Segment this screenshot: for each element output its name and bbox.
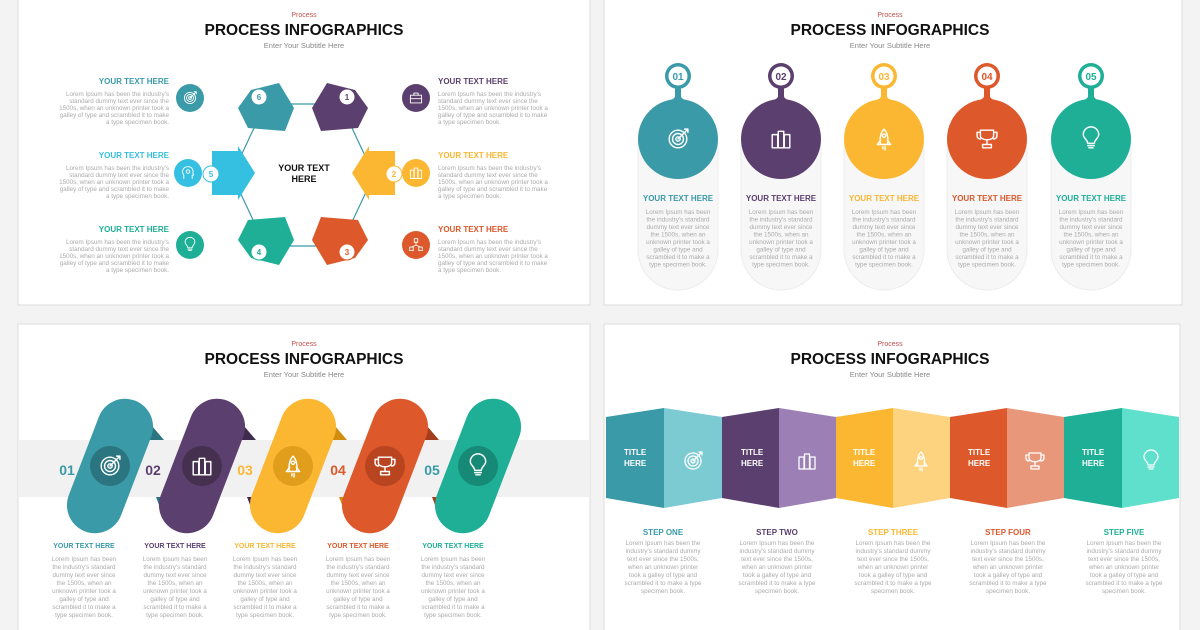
right text blocks: YOUR TEXT HERE	[438, 151, 509, 160]
fold 4	[950, 408, 1064, 508]
slide 4 step texts: when an unknown printer	[741, 564, 812, 571]
slide 3 header: Enter Your Subtitle Here	[264, 370, 344, 379]
fold 4: HERE	[968, 459, 991, 468]
slide 2 header: Process	[877, 12, 903, 19]
left text blocks: a type specimen book.	[106, 119, 169, 126]
left text blocks: galley of type and scrambled it to make	[60, 112, 169, 119]
left text blocks: YOUR TEXT HERE	[99, 151, 170, 160]
panel: slide 3 diagonal pills	[18, 324, 590, 630]
step 04 card: the industry's standard	[955, 216, 1019, 224]
slide 3 text columns: scrambled it to make a	[326, 604, 390, 611]
pill 03: 03	[237, 462, 253, 478]
center octagon	[239, 104, 367, 246]
slide 3 text columns: the industry's standard	[421, 564, 485, 571]
step 05 card: the 1500s, when an	[1064, 232, 1119, 238]
arrow 4	[238, 217, 294, 265]
slide 3 text columns: dummy text ever since	[326, 572, 390, 579]
arrow 4: 4	[257, 248, 262, 257]
slide 4 step texts: text ever since the 1500s,	[741, 556, 813, 563]
left text blocks: a type specimen book.	[106, 267, 169, 274]
step 05 card: galley of type and	[1066, 246, 1116, 254]
left text blocks: YOUR TEXT HERE	[99, 77, 170, 86]
slide 1 header: Enter Your Subtitle Here	[264, 41, 344, 50]
left text blocks: Lorem Ipsum has been the industry's	[66, 239, 169, 246]
fold 3: HERE	[853, 459, 876, 468]
arrow 3	[312, 217, 368, 265]
right text blocks: a type specimen book.	[438, 119, 501, 126]
slide 4 step texts: took a galley of type and	[743, 572, 812, 579]
step 03 card: galley of type and	[859, 246, 909, 254]
slide 3 text columns: unknown printer took a	[143, 588, 207, 595]
slide 3 text columns: unknown printer took a	[421, 588, 485, 595]
slide 4 step texts: took a galley of type and	[974, 572, 1043, 579]
step 02 card: unknown printer took a	[749, 239, 813, 246]
slide 3 text columns: dummy text ever since	[234, 572, 297, 579]
step 02 card: the industry's standard	[749, 216, 813, 224]
pill 04: 04	[330, 462, 346, 478]
arrow 2	[352, 146, 402, 200]
fold 1: HERE	[624, 459, 647, 468]
slide 3 text columns: the 1500s, when an	[426, 580, 481, 587]
slide 4 step texts: industry's standard dummy	[739, 548, 815, 555]
slide 3 text columns: dummy text ever since	[144, 572, 207, 579]
right text blocks: standard dummy text ever since the	[438, 98, 538, 105]
slide 4 header: Enter Your Subtitle Here	[850, 370, 930, 379]
right text blocks: galley of type and scrambled it to make	[438, 186, 548, 193]
slide 4 step texts: when an unknown printer	[1088, 564, 1159, 571]
step 04 card: 04	[981, 72, 993, 83]
slide 4 step texts: scrambled it to make a type	[854, 580, 932, 587]
slide 3 header: Process	[291, 341, 317, 348]
arrow 3: 3	[345, 248, 350, 257]
icon: head	[174, 159, 202, 187]
step 05 card: the industry's standard	[1059, 216, 1123, 224]
slide 4 step texts: industry's standard dummy	[625, 548, 701, 555]
slide 3 text columns: Lorem Ipsum has been	[233, 556, 298, 563]
step 04 card: the 1500s, when an	[960, 232, 1015, 238]
slide 4 step texts: scrambled it to make a type	[970, 580, 1047, 587]
icon: target	[176, 84, 204, 112]
step 02 card: dummy text ever since	[750, 224, 813, 231]
pill 02: 02	[145, 462, 161, 478]
fold 5	[1064, 408, 1179, 508]
pill 01	[59, 391, 164, 541]
arrow 5	[203, 146, 255, 200]
slide 4 step texts: text ever since the 1500s,	[972, 556, 1044, 563]
right text blocks: 1500s, when an unknown printer took a	[438, 253, 548, 260]
slide 2 header: Enter Your Subtitle Here	[850, 41, 930, 50]
center octagon: YOUR TEXT	[278, 163, 330, 173]
step 01 card: 01	[672, 72, 684, 83]
step 02 card	[741, 63, 821, 290]
slide 3 text columns: the 1500s, when an	[238, 580, 293, 587]
fold 1: TITLE	[624, 448, 647, 457]
slide 4 step texts: Lorem Ipsum has been the	[740, 540, 815, 547]
slide 3 text columns: galley of type and	[150, 596, 200, 603]
right text blocks: Lorem Ipsum has been the industry's	[438, 165, 541, 172]
fold 5: HERE	[1082, 459, 1105, 468]
fold 2: TITLE	[741, 448, 764, 457]
slide 1 header: PROCESS INFOGRAPHICS	[205, 22, 403, 39]
slide 3 text columns: the industry's standard	[326, 564, 390, 571]
panel: slide 1 hexagon process	[18, 0, 590, 305]
slide 4 step texts: Lorem Ipsum has been the	[971, 540, 1046, 547]
step 01 card: YOUR TEXT HERE	[643, 194, 714, 203]
right text blocks: galley of type and scrambled it to make	[438, 112, 548, 119]
slide 3 text columns: the 1500s, when an	[148, 580, 203, 587]
step 05 card: dummy text ever since	[1060, 224, 1123, 231]
slide 4 step texts: STEP TWO	[756, 528, 798, 537]
slide 4 step texts: scrambled it to make a type	[1086, 580, 1163, 587]
step 02 card: YOUR TEXT HERE	[746, 194, 817, 203]
step 04 card	[947, 63, 1027, 290]
slide 3 text columns: Lorem Ipsum has been	[143, 556, 208, 563]
slide 3 text columns: type specimen book.	[55, 612, 113, 619]
fold 2: HERE	[741, 459, 764, 468]
step 05 card: YOUR TEXT HERE	[1056, 194, 1127, 203]
slide 3 text columns: scrambled it to make a	[421, 604, 485, 611]
step 04 card: unknown printer took a	[955, 239, 1019, 246]
step 03 card: 03	[878, 72, 890, 83]
step 01 card: type specimen book.	[649, 262, 707, 268]
slide 4 step texts: took a galley of type and	[859, 572, 928, 579]
right text blocks: standard dummy text ever since the	[438, 246, 538, 253]
step 04 card: galley of type and	[962, 246, 1012, 254]
pill 04	[330, 391, 439, 541]
fold 5: TITLE	[1082, 448, 1105, 457]
slide 3 text columns: the 1500s, when an	[331, 580, 386, 587]
left text blocks: 1500s, when an unknown printer took a	[59, 105, 169, 112]
slide 1 header: Process	[291, 12, 317, 19]
step 02 card: galley of type and	[756, 246, 806, 254]
slide 4 step texts: took a galley of type and	[629, 572, 698, 579]
arrow 1	[312, 83, 368, 131]
slide 3 text columns: YOUR TEXT HERE	[53, 543, 115, 550]
slide 4 step texts: scrambled it to make a type	[738, 580, 816, 587]
step 05 card: Lorem Ipsum has been	[1059, 209, 1124, 216]
left text blocks: standard dummy text ever since the	[69, 98, 169, 105]
slide 2 header	[791, 12, 989, 50]
slide 3 header	[205, 341, 403, 379]
slide 4 step texts: industry's standard dummy	[970, 548, 1046, 555]
slide 4 step texts: STEP THREE	[868, 528, 919, 537]
pill 05	[424, 391, 529, 541]
fold 3: TITLE	[853, 448, 876, 457]
step 01 card: Lorem Ipsum has been	[646, 209, 711, 216]
arrow 5: 5	[209, 170, 214, 179]
left text blocks: standard dummy text ever since the	[69, 172, 169, 179]
step 01 card: the 1500s, when an	[651, 232, 706, 238]
fold 1	[606, 408, 722, 508]
step 03 card: Lorem Ipsum has been	[852, 209, 917, 216]
slide 4 step texts: specimen book.	[755, 588, 799, 595]
center octagon: HERE	[291, 174, 317, 184]
pill 03	[237, 391, 347, 541]
slide 4 header: PROCESS INFOGRAPHICS	[791, 351, 989, 368]
fold 4: TITLE	[968, 448, 991, 457]
slide 3 text columns: YOUR TEXT HERE	[327, 543, 389, 550]
slide 3 text columns: type specimen book.	[424, 612, 482, 619]
slide 3 text columns: dummy text ever since	[52, 572, 116, 579]
slide 3 text columns: Lorem Ipsum has been	[52, 556, 117, 563]
left text blocks: standard dummy text ever since the	[69, 246, 169, 253]
slide 3 text columns: YOUR TEXT HERE	[144, 543, 206, 550]
slide 4 step texts: specimen book.	[641, 588, 685, 595]
icon: bulb	[176, 231, 204, 259]
step 01 card: the industry's standard	[646, 216, 710, 224]
panel: slide 2 numbered circles	[604, 0, 1182, 305]
fold 3	[836, 408, 950, 508]
step 02 card: scrambled it to make a	[749, 254, 813, 261]
pill 01: 01	[59, 462, 75, 478]
slide 3 text columns: galley of type and	[59, 596, 109, 603]
slide 3 text columns: scrambled it to make a	[233, 604, 297, 611]
fold 2	[722, 408, 836, 508]
right text blocks: 1500s, when an unknown printer took a	[438, 179, 548, 186]
slide 3 text columns	[52, 543, 486, 619]
left text blocks: Lorem Ipsum has been the industry's	[66, 91, 169, 98]
slide 4 step texts: specimen book.	[1102, 588, 1146, 595]
step 03 card: the 1500s, when an	[857, 232, 912, 238]
step 03 card: type specimen book.	[855, 262, 913, 268]
slide 4 step texts: scrambled it to make a type	[624, 580, 702, 587]
step 01 card: unknown printer took a	[646, 239, 710, 246]
slide 4 step texts: Lorem Ipsum has been the	[856, 540, 931, 547]
step 02 card: 02	[775, 72, 787, 83]
slide 1 header	[205, 12, 403, 50]
step 03 card: YOUR TEXT HERE	[849, 194, 920, 203]
slide 4 step texts: industry's standard dummy	[1086, 548, 1162, 555]
slide 3 text columns: type specimen book.	[146, 612, 204, 619]
slide 2 header: PROCESS INFOGRAPHICS	[791, 22, 989, 39]
slide 3 text columns: type specimen book.	[329, 612, 387, 619]
step 04 card: YOUR TEXT HERE	[952, 194, 1023, 203]
left text blocks: YOUR TEXT HERE	[99, 225, 170, 234]
slide 3 text columns: the industry's standard	[233, 564, 297, 571]
slide 4 step texts: Lorem Ipsum has been the	[626, 540, 701, 547]
slide 4 step texts: text ever since the 1500s,	[627, 556, 699, 563]
slide 3 text columns: scrambled it to make a	[52, 604, 116, 611]
left text blocks	[59, 77, 170, 274]
arrow 6: 6	[257, 93, 262, 102]
slide 3 text columns: the 1500s, when an	[57, 580, 112, 587]
step 02 card: Lorem Ipsum has been	[749, 209, 814, 216]
step 03 card: dummy text ever since	[852, 224, 916, 231]
slide 3 text columns: unknown printer took a	[326, 588, 390, 595]
step 03 card: scrambled it to make a	[852, 254, 916, 261]
right text blocks: a type specimen book.	[438, 267, 501, 274]
slide 4 step texts: specimen book.	[986, 588, 1030, 595]
step 03 card: unknown printer took a	[852, 239, 916, 246]
slide 3 text columns: galley of type and	[428, 596, 478, 603]
slide 4 step texts: STEP ONE	[643, 528, 684, 537]
step 01 card: dummy text ever since	[646, 224, 710, 231]
step 01 card: galley of type and	[653, 246, 703, 254]
panel: slide 4 folded steps	[604, 324, 1180, 630]
pill 05: 05	[424, 462, 440, 478]
slide 4 step texts: took a galley of type and	[1090, 572, 1159, 579]
slide 3 text columns: dummy text ever since	[422, 572, 485, 579]
left text blocks: 1500s, when an unknown printer took a	[59, 253, 169, 260]
slide 3 text columns: type specimen book.	[236, 612, 294, 619]
step 05 card: scrambled it to make a	[1059, 254, 1123, 261]
left text blocks: galley of type and scrambled it to make	[60, 260, 169, 267]
arrow 2: 2	[392, 170, 397, 179]
grey band	[18, 440, 590, 497]
slide 3 text columns: scrambled it to make a	[143, 604, 207, 611]
arrow 6	[238, 83, 294, 131]
step 03 card: the industry's standard	[852, 216, 916, 224]
slide 3 header: PROCESS INFOGRAPHICS	[205, 351, 403, 368]
slide 3 text columns: unknown printer took a	[52, 588, 116, 595]
icon: briefcase	[402, 84, 430, 112]
step 01 card	[638, 63, 718, 290]
right text blocks: a type specimen book.	[438, 193, 501, 200]
arrow 1: 1	[345, 93, 350, 102]
pill 02	[145, 391, 256, 541]
right text blocks: 1500s, when an unknown printer took a	[438, 105, 548, 112]
step 02 card: type specimen book.	[752, 262, 810, 268]
step 01 card: scrambled it to make a	[646, 254, 710, 261]
slide 4 step texts: when an unknown printer	[627, 564, 698, 571]
slide 3 text columns: the industry's standard	[52, 564, 116, 571]
slide 4 step texts: STEP FOUR	[985, 528, 1031, 537]
slide 4 header	[791, 341, 989, 379]
left text blocks: Lorem Ipsum has been the industry's	[66, 165, 169, 172]
slide 4 step texts: when an unknown printer	[857, 564, 928, 571]
step 03 card	[844, 63, 924, 290]
slide 4 step texts	[624, 528, 1163, 595]
slide 4 step texts: STEP FIVE	[1104, 528, 1145, 537]
right text blocks: YOUR TEXT HERE	[438, 77, 509, 86]
slide 4 step texts: text ever since the 1500s,	[1088, 556, 1160, 563]
slide 3 text columns: unknown printer took a	[233, 588, 297, 595]
step 04 card: dummy text ever since	[956, 224, 1019, 231]
slide 4 step texts: Lorem Ipsum has been the	[1087, 540, 1162, 547]
step 05 card	[1051, 63, 1131, 290]
slide 4 step texts: specimen book.	[871, 588, 915, 595]
step 05 card: unknown printer took a	[1059, 239, 1123, 246]
icon: buildings	[402, 159, 430, 187]
step 02 card: the 1500s, when an	[754, 232, 809, 238]
step 04 card: scrambled it to make a	[955, 254, 1019, 261]
slide 4 step texts: when an unknown printer	[972, 564, 1043, 571]
slide 3 text columns: YOUR TEXT HERE	[422, 543, 484, 550]
left text blocks: 1500s, when an unknown printer took a	[59, 179, 169, 186]
slide 3 text columns: galley of type and	[240, 596, 290, 603]
step 05 card: type specimen book.	[1062, 262, 1120, 268]
left text blocks: a type specimen book.	[106, 193, 169, 200]
right text blocks: standard dummy text ever since the	[438, 172, 538, 179]
right text blocks: galley of type and scrambled it to make	[438, 260, 548, 267]
right text blocks: Lorem Ipsum has been the industry's	[438, 91, 541, 98]
right text blocks	[438, 77, 548, 274]
slide 3 text columns: YOUR TEXT HERE	[234, 543, 296, 550]
left text blocks: galley of type and scrambled it to make	[60, 186, 169, 193]
step 04 card: Lorem Ipsum has been	[955, 209, 1020, 216]
icon: network	[402, 231, 430, 259]
slide 3 text columns: the industry's standard	[143, 564, 207, 571]
slide 4 step texts: text ever since the 1500s,	[857, 556, 929, 563]
slide 4 step texts: industry's standard dummy	[855, 548, 931, 555]
slide 3 text columns: galley of type and	[333, 596, 383, 603]
slide 3 text columns: Lorem Ipsum has been	[326, 556, 391, 563]
slide 3 text columns: Lorem Ipsum has been	[421, 556, 486, 563]
right text blocks: Lorem Ipsum has been the industry's	[438, 239, 541, 246]
right text blocks: YOUR TEXT HERE	[438, 225, 509, 234]
slide 4 header: Process	[877, 341, 903, 348]
step 05 card: 05	[1085, 72, 1097, 83]
step 04 card: type specimen book.	[958, 262, 1016, 268]
